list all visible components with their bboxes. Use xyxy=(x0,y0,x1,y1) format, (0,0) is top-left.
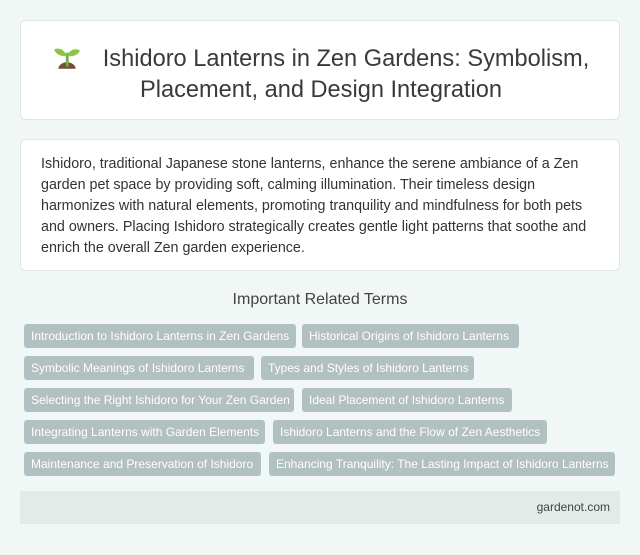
tags: Symbolic Meanings of Ishidoro Lanterns xyxy=(31,361,244,375)
tags: Ishidoro Lanterns and the Flow of Zen Aesthetics xyxy=(280,425,540,439)
description card xyxy=(20,139,620,271)
description text: Ishidoro, traditional Japanese stone lanterns, enhance the serene ambiance of a Zen garden pet space by providing soft, calming illumination. Their timeless design harmonizes with natural elements, promoting tranquility and mindfulness for both pets and owners. Placing Ishidoro strategically creates gentle light patterns that soothe and enrich the overall Zen garden experience. xyxy=(41,156,586,256)
tags: Types and Styles of Ishidoro Lanterns xyxy=(268,361,469,375)
tags: Historical Origins of Ishidoro Lanterns xyxy=(309,329,509,343)
tags: Maintenance and Preservation of Ishidoro xyxy=(31,457,253,471)
footer: gardenot.com xyxy=(537,500,610,514)
tags: Enhancing Tranquility: The Lasting Impact of Ishidoro Lanterns xyxy=(276,457,609,471)
tags: Ideal Placement of Ishidoro Lanterns xyxy=(309,393,504,407)
title with icon: Ishidoro Lanterns in Zen Gardens: Symbolism, Placement, and Design Integration xyxy=(103,46,589,103)
tags: Integrating Lanterns with Garden Elements xyxy=(31,425,259,439)
heading: related terms: Important Related Terms xyxy=(233,291,407,308)
footer xyxy=(20,491,620,524)
tags: Selecting the Right Ishidoro for Your Zen Garden xyxy=(31,393,290,407)
header card xyxy=(20,20,620,120)
tags: Introduction to Ishidoro Lanterns in Zen Gardens xyxy=(31,329,289,343)
